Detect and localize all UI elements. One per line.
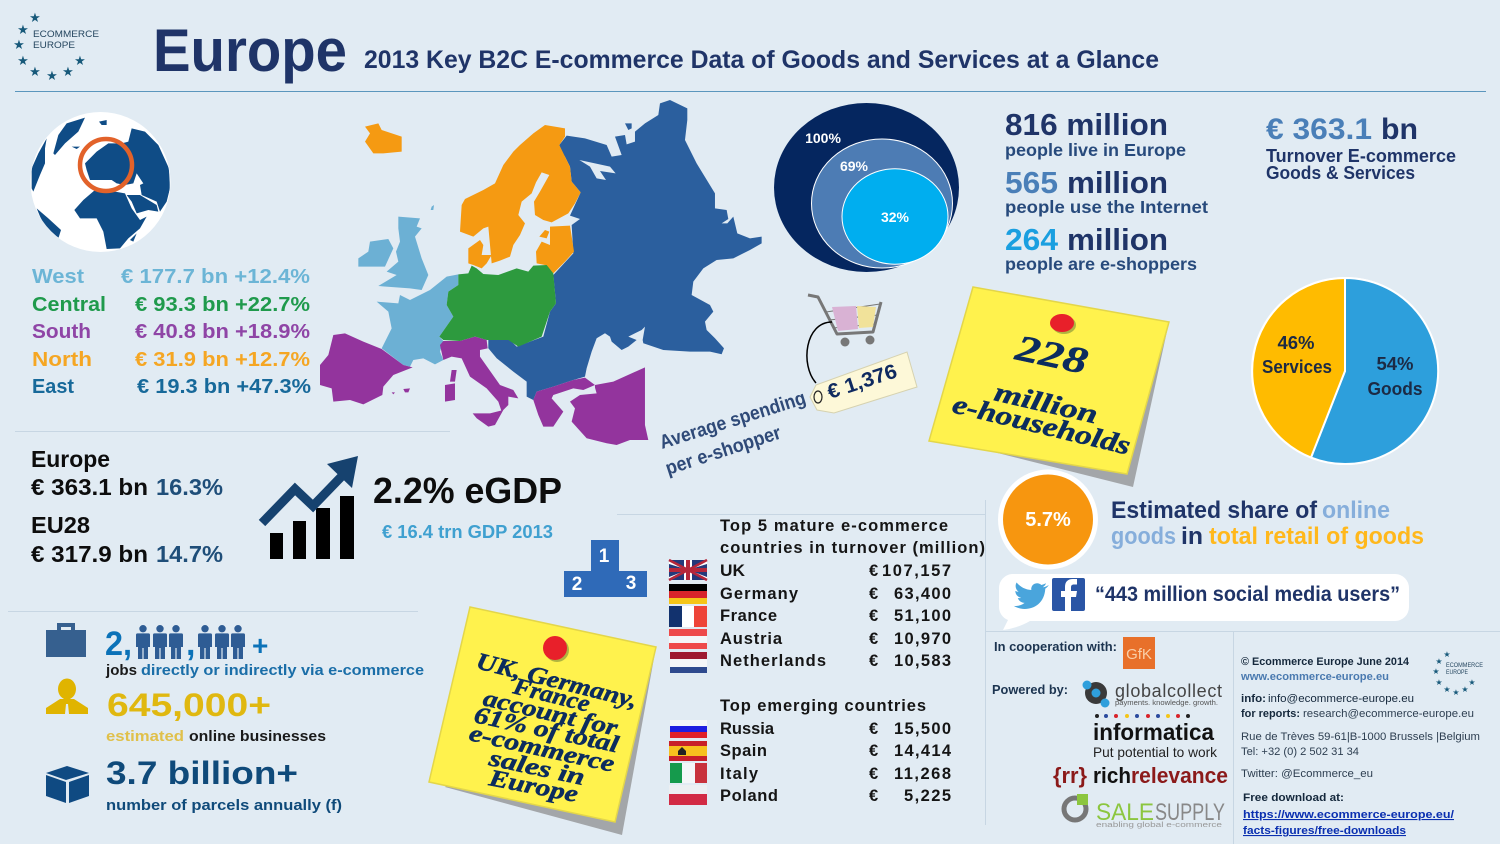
Central (32, 293, 310, 316)
table: top emerging countries: 5,225 (904, 787, 951, 805)
turnover: Goods & Services (1266, 162, 1415, 183)
stat: 565 million: 565 (1005, 165, 1058, 200)
contact information (1240, 656, 1480, 837)
jobs caption: jobs (105, 662, 137, 679)
powered by label: Powered by: (992, 683, 1068, 697)
logo: Ecommerce Europe: ★ (62, 65, 74, 80)
email reports: for reports: (1241, 708, 1300, 720)
flag: Poland (669, 785, 707, 805)
table: top 5 mature countries: 51,100 (894, 607, 951, 625)
West (32, 265, 310, 288)
South: South (32, 320, 91, 343)
internet use circles (774, 103, 959, 272)
icon: facebook (1052, 578, 1085, 611)
cooperation label: In cooperation with: (994, 640, 1117, 654)
table: top 5 mature countries: € (869, 607, 878, 625)
table: top emerging countries: € (869, 720, 878, 738)
parcels caption: number of parcels annually (f) (106, 797, 342, 814)
turnover: Turnover E-commerce (1266, 145, 1456, 166)
table: top emerging countries: € (869, 765, 878, 783)
table: top emerging countries: Italy (720, 765, 759, 783)
Europe and EU28 totals (31, 446, 223, 567)
table: top 5 mature countries: 10,970 (894, 630, 951, 648)
logo: GfK (1123, 637, 1155, 669)
flag: Austria (669, 629, 707, 649)
stat: 816 million (1005, 107, 1186, 160)
small logo: Ecommerce Europe: ★ (1443, 650, 1451, 659)
employment stats (46, 623, 424, 814)
logo: Ecommerce Europe: ★ (29, 11, 41, 26)
estimated share text: online (1322, 497, 1390, 524)
header rule (15, 91, 1486, 92)
icon: parcel (46, 766, 89, 803)
Europe and EU28 totals: 14.7% (156, 541, 223, 567)
table: top 5 mature countries: € (869, 630, 878, 648)
sticky note: 228 million e-households: 228 (1011, 327, 1091, 383)
telephone: Tel: +32 (0) 2 502 31 34 (1241, 746, 1359, 758)
logo: GfK: GfK (1126, 646, 1152, 663)
table: top 5 mature countries: Austria (720, 630, 783, 648)
East: East (32, 375, 74, 398)
sticky note: UK, Germany, France: Europe (486, 765, 581, 808)
logo: GlobalCollect: globalcollect (1115, 681, 1222, 701)
table: top 5 mature countries: € (869, 652, 878, 670)
estimated share text: goods (1111, 523, 1176, 550)
table: top emerging countries: 11,268 (894, 765, 951, 783)
table: top emerging countries: 15,500 (894, 720, 951, 738)
sticky note: UK, Germany, France (429, 607, 656, 835)
East (32, 375, 311, 398)
small logo: Ecommerce Europe: ★ (1432, 667, 1440, 676)
sticky note: UK, Germany, France: 61% of total (472, 702, 621, 759)
address: Rue de Trèves 59-61|B-1000 Brussels |Belgium (1241, 731, 1480, 743)
small logo: Ecommerce Europe: ★ (1452, 688, 1460, 697)
logo: Ecommerce Europe: ★ (46, 69, 58, 84)
Europe and EU28 totals: EU28 (31, 512, 90, 538)
stat: 264 million (1005, 222, 1197, 274)
small logo: Ecommerce Europe: ★ (1435, 678, 1443, 687)
jobs figure: , (186, 625, 195, 663)
turnover (1266, 113, 1456, 183)
icon: twitter (1014, 582, 1049, 609)
twitter handle: Twitter: @Ecommerce_eu (1241, 768, 1373, 780)
pie chart: goods vs services: Goods (1368, 378, 1422, 399)
online share circle (998, 470, 1098, 570)
copyright: © Ecommerce Europe June 2014 (1241, 656, 1410, 668)
logo: Ecommerce Europe (13, 11, 99, 84)
table: top 5 mature countries: € (869, 562, 878, 580)
Central: Central (32, 293, 106, 316)
social media bubble (999, 574, 1409, 630)
table: top 5 mature countries: UK (720, 562, 745, 580)
West: € 177.7 bn +12.4% (121, 265, 310, 288)
West: West (32, 265, 84, 288)
table: top emerging countries: 14,414 (894, 742, 952, 760)
logo: Ecommerce Europe: EUROPE (33, 40, 75, 51)
table: top emerging countries (669, 697, 952, 805)
icon: podium: 2 (572, 574, 582, 595)
internet use circles: 32% (881, 209, 910, 225)
title: Europe (153, 17, 347, 84)
small logo: Ecommerce Europe (1432, 650, 1484, 697)
logo: Informatica: informatica (1093, 719, 1214, 745)
logo: SaleSupply: enabling global e-commerce (1096, 822, 1222, 829)
table: top 5 mature countries: Top 5 mature e-commerce (720, 517, 948, 535)
stat: 565 million: people use the Internet (1005, 197, 1208, 217)
map region: North (365, 123, 581, 273)
average spending caption: Average spending (657, 387, 808, 454)
flag: Italy (670, 763, 707, 783)
jobs figure (105, 625, 268, 663)
flag: France (669, 606, 707, 627)
average spending caption (657, 387, 808, 480)
map of Europe (320, 100, 762, 445)
jobs figure: 2, (105, 625, 132, 663)
logo: SaleSupply (1064, 794, 1225, 829)
download link (1243, 809, 1454, 837)
flag: Germany (669, 584, 707, 604)
small logo: Ecommerce Europe: ECOMMERCE (1446, 662, 1484, 669)
logo: RichRelevance: relevance (1131, 763, 1228, 788)
small logo: Ecommerce Europe: ★ (1461, 685, 1469, 694)
table: top 5 mature countries: 63,400 (894, 585, 951, 603)
social media bubble: “443 million social media users” (1095, 582, 1400, 606)
estimated share text: Estimated share of (1111, 497, 1318, 524)
table: top 5 mature countries: 107,157 (882, 562, 951, 580)
logo: SaleSupply: SALE (1096, 799, 1154, 826)
eGDP (373, 470, 562, 542)
sticky note: 228 million e-households (929, 287, 1169, 487)
turnover: bn (1381, 113, 1418, 146)
map region: Central (439, 265, 556, 347)
logo: RichRelevance: rich (1093, 763, 1131, 788)
logo: Informatica: Put potential to work (1093, 744, 1218, 760)
South: € 40.8 bn +18.9% (135, 320, 310, 343)
estimated share text (1111, 497, 1424, 550)
Europe and EU28 totals: Europe (31, 446, 110, 472)
logo: Ecommerce Europe: ★ (74, 54, 86, 69)
sticky note: UK, Germany, France: e-commerce (467, 720, 617, 778)
sticky note: UK, Germany, France: France (509, 673, 593, 718)
partners (992, 637, 1228, 829)
North (32, 348, 310, 371)
email info: info@ecommerce-europe.eu (1268, 693, 1414, 705)
stat: 816 million: 816 million (1005, 107, 1168, 142)
table: top 5 mature countries: € (869, 585, 878, 603)
estimated share text: total retail of goods (1209, 523, 1424, 550)
pie chart: goods vs services (1251, 277, 1439, 465)
logo: Ecommerce Europe: ★ (29, 65, 41, 80)
stat: 565 million: million (1067, 165, 1168, 200)
North: € 31.9 bn +12.7% (135, 348, 310, 371)
map region: East (488, 100, 762, 400)
map region: West (358, 205, 458, 367)
download link: https://www.ecommerce-europe.eu/ (1243, 809, 1454, 821)
sticky note: UK, Germany, France: UK, Germany, (474, 649, 640, 714)
logo: Ecommerce Europe: ECOMMERCE (33, 29, 99, 40)
icon: shopping cart with price tag (807, 295, 917, 413)
email info: info: (1241, 693, 1266, 705)
pie chart: goods vs services: 54% (1376, 353, 1414, 374)
South (32, 320, 310, 343)
sticky note: 228 million e-households: million (992, 377, 1101, 429)
stat: 264 million: 264 (1005, 222, 1059, 257)
logo: RichRelevance (1053, 763, 1228, 788)
small logo: Ecommerce Europe: EUROPE (1446, 669, 1469, 676)
average spending caption: per e-shopper (663, 422, 784, 480)
businesses caption (106, 728, 326, 745)
logo: Ecommerce Europe: ★ (17, 23, 29, 38)
flag: Netherlands (670, 652, 707, 673)
email reports: research@ecommerce-europe.eu (1303, 708, 1474, 720)
sticky note: UK, Germany, France: account for (481, 686, 621, 742)
small logo: Ecommerce Europe: ★ (1468, 678, 1476, 687)
parcels figure: 3.7 billion+ (106, 755, 298, 791)
stat: 264 million: people are e-shoppers (1005, 254, 1197, 274)
website: www.ecommerce-europe.eu (1240, 671, 1389, 683)
stat: 264 million: million (1067, 222, 1168, 257)
population stats (1005, 107, 1208, 274)
small logo: Ecommerce Europe: ★ (1435, 657, 1443, 666)
stat: 565 million (1005, 165, 1208, 217)
jobs figure: + (252, 630, 268, 661)
icon: growth bar chart (262, 456, 358, 559)
icon: podium (564, 540, 647, 597)
icon: podium: 1 (599, 546, 610, 567)
pie chart: goods vs services: Services (1262, 356, 1332, 377)
table: top 5 mature countries: France (720, 607, 777, 625)
icon: briefcase (46, 623, 86, 657)
icon: business person (46, 678, 88, 714)
stat: 816 million: people live in Europe (1005, 140, 1186, 160)
map region: South (320, 333, 648, 445)
download label: Free download at: (1243, 792, 1344, 804)
businesses caption: estimated (106, 728, 184, 745)
East: € 19.3 bn +47.3% (137, 375, 311, 398)
table: top emerging countries: Russia (720, 720, 775, 738)
icon: podium: 3 (626, 573, 636, 594)
eGDP: 2.2% eGDP (373, 470, 562, 511)
Europe and EU28 totals: € 317.9 bn (31, 541, 148, 567)
icon: globe (30, 112, 170, 252)
online share circle: 5.7% (1025, 509, 1071, 531)
small logo: Ecommerce Europe: ★ (1443, 685, 1451, 694)
logo: Ecommerce Europe: ★ (13, 38, 25, 53)
logo: GlobalCollect: payments. knowledge. growth. (1115, 700, 1218, 707)
table: top 5 mature countries: Netherlands (720, 652, 826, 670)
table: top emerging countries: € (869, 742, 878, 760)
turnover: € 363.1 (1266, 113, 1372, 146)
logo: GlobalCollect (1082, 680, 1222, 708)
internet use circles: 100% (805, 130, 841, 146)
table: top 5 mature countries: countries in turnover (million) (720, 539, 985, 557)
table: top 5 mature countries: Germany (720, 585, 799, 603)
logo: Informatica (1093, 714, 1218, 760)
sticky note: UK, Germany, France: sales in (485, 745, 587, 791)
flag: Spain (669, 741, 707, 761)
flag: UK (669, 560, 707, 580)
North: North (32, 348, 92, 371)
sticky note: 228 million e-households: e-households (950, 389, 1134, 461)
table: top 5 mature countries: 10,583 (894, 652, 951, 670)
jobs caption: directly or indirectly via e-commerce (141, 662, 424, 679)
Europe and EU28 totals: € 363.1 bn (31, 474, 148, 500)
eGDP: € 16.4 trn GDP 2013 (382, 521, 553, 542)
table: top 5 mature countries (669, 517, 985, 673)
icon: shopping cart with price tag: € 1,376 (824, 360, 900, 404)
flag: Russia (670, 720, 707, 738)
Europe and EU28 totals: 16.3% (156, 474, 223, 500)
pie chart: goods vs services: 46% (1277, 332, 1315, 353)
table: top emerging countries: Top emerging countries (720, 697, 926, 715)
regional turnover list (32, 265, 311, 398)
download link: facts-figures/free-downloads (1243, 825, 1406, 837)
subtitle: 2013 Key B2C E-commerce Data of Goods and Services at a Glance (364, 46, 1159, 74)
businesses figure: 645,000+ (107, 687, 271, 723)
table: top emerging countries: Poland (720, 787, 778, 805)
table: top emerging countries: Spain (720, 742, 767, 760)
table: top emerging countries: € (869, 787, 878, 805)
logo: RichRelevance: {rr} (1053, 763, 1087, 788)
logo: SaleSupply: SUPPLY (1155, 799, 1225, 826)
estimated share text: in (1181, 523, 1203, 550)
logo: Ecommerce Europe: ★ (17, 54, 29, 69)
internet use circles: 69% (840, 158, 869, 174)
Central: € 93.3 bn +22.7% (135, 293, 310, 316)
businesses caption: online businesses (189, 728, 326, 745)
